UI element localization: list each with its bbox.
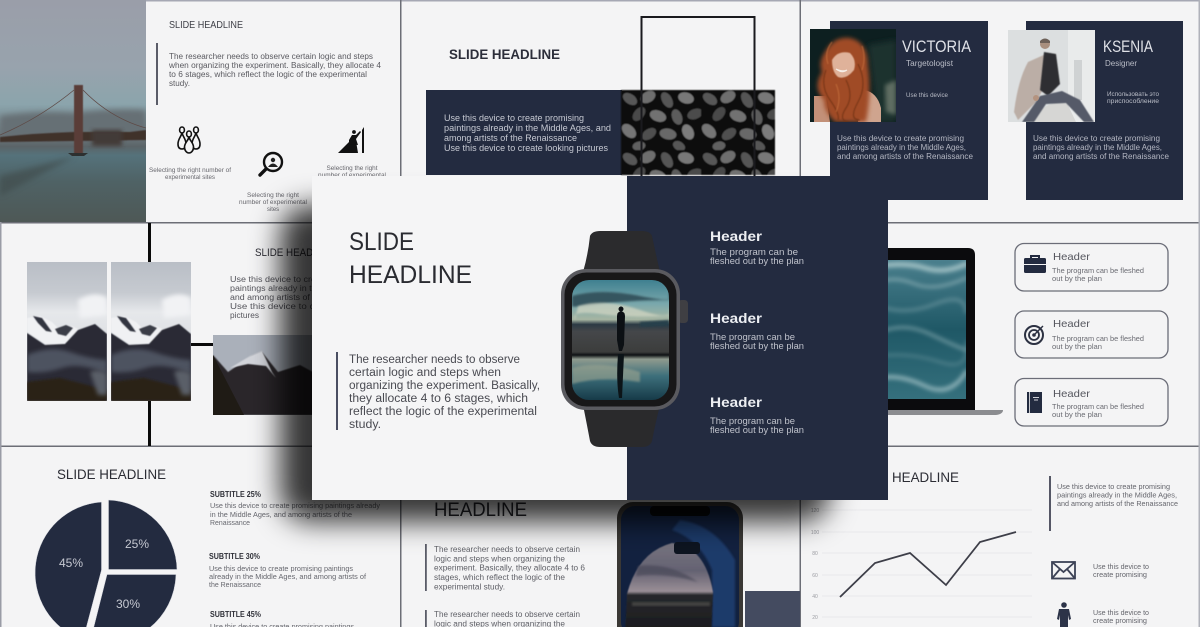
connector lines	[148, 223, 213, 446]
feature: header three: fleshed out by the plan	[710, 425, 804, 436]
legend: subtitle 25	[210, 490, 380, 527]
feature: header one: The program can be	[710, 247, 798, 258]
band text: Use this device to create looking pictures	[444, 143, 608, 153]
note: приспособление	[1107, 99, 1160, 105]
bio: Use this device to create promising	[1033, 134, 1160, 143]
line chart: 20	[812, 615, 818, 621]
box: Header two: out by the plan	[1052, 342, 1102, 351]
box: Header three	[1015, 378, 1168, 426]
photo: Ksenia portrait	[1008, 30, 1095, 122]
heading: SLIDE HEADLINE	[169, 19, 243, 31]
panel: leaves slide	[426, 17, 775, 177]
box: Header one: out by the plan	[1052, 274, 1102, 283]
caption: number of experimental	[318, 172, 387, 179]
text: create promising	[1093, 616, 1147, 625]
bio	[837, 134, 974, 161]
paragraph: to 6 stages, which reflect the logic of the experimental	[169, 70, 367, 79]
role: Targetologist	[906, 59, 954, 68]
icon: envelope	[1052, 562, 1075, 578]
bio: Use this device to create promising	[837, 134, 964, 143]
icon: bowling pins	[178, 127, 200, 153]
caption: Selecting the right	[326, 165, 378, 172]
card: Ksenia	[1026, 21, 1183, 200]
legend: subtitle 30	[209, 552, 367, 589]
paragraph	[1057, 482, 1178, 508]
note: Использовать это	[1107, 92, 1160, 98]
heading: HEADLINE	[892, 469, 959, 485]
paragraph: The researcher needs to observe certain logic and steps	[169, 52, 373, 61]
heading: SLIDE HEADLINE	[449, 46, 560, 62]
paragraph: when organizing the experiment. Basically, they allocate 4	[168, 61, 382, 70]
legend: subtitle 30: Use this device to create promising paintings	[209, 564, 353, 573]
caption	[239, 192, 308, 213]
strap	[583, 231, 660, 272]
paragraph	[168, 52, 382, 88]
watch illustration	[561, 231, 688, 447]
bio: and among artists of the Renaissance	[1033, 152, 1170, 161]
paragraph: reflect the logic of the experimental	[349, 406, 537, 418]
slice labels: 45%	[59, 556, 83, 570]
paragraph: Use this device to create promising	[1057, 482, 1170, 491]
icon: climber	[338, 127, 364, 153]
legend: subtitle 25: Renaissance	[210, 518, 250, 527]
caption	[318, 165, 387, 179]
panel: mountains slide	[27, 223, 312, 446]
slice: 30%	[90, 574, 176, 627]
box: Header two	[1015, 311, 1168, 358]
line chart: 60	[812, 573, 818, 579]
slice labels: 25%	[125, 537, 149, 551]
feature: header three: Header	[710, 394, 763, 410]
legend: subtitle 30: the Renaissance	[209, 580, 261, 589]
panel: line chart slide	[811, 469, 1178, 627]
role: Designer	[1105, 59, 1137, 68]
outline frame	[642, 17, 754, 177]
paragraph: Use this device to create promising	[230, 275, 370, 284]
paragraph	[434, 610, 580, 627]
legend: subtitle 30: already in the Middle Ages, and among artists of	[209, 572, 367, 581]
screen photo	[572, 280, 671, 400]
paragraph: they allocate 4 to 6 stages, which	[349, 393, 528, 405]
slice: 45%	[35, 502, 102, 627]
line chart: 100	[811, 530, 819, 536]
text: Use this device to	[1093, 562, 1149, 571]
text: create promising	[1093, 570, 1147, 579]
band text	[444, 113, 611, 153]
line chart	[811, 508, 1032, 621]
box: Header three: out by the plan	[1052, 410, 1102, 419]
name: Victoria: VICTORIA	[902, 37, 972, 56]
caption: number of experimental	[239, 199, 308, 206]
text	[1093, 562, 1149, 579]
main slide card	[312, 176, 888, 500]
photo: leaves	[621, 90, 775, 175]
feature: header one	[710, 228, 804, 267]
paragraph: The researcher needs to observe	[349, 354, 520, 366]
paragraph: Use this device to create looking	[230, 302, 370, 311]
accent bar	[425, 544, 427, 591]
navy text band	[426, 90, 622, 175]
slice labels	[59, 537, 149, 611]
bio: paintings already in the Middle Ages,	[1033, 143, 1162, 152]
text: Header	[1053, 251, 1091, 263]
caption: Selecting the right number of	[149, 167, 231, 174]
photo: mountains middle	[111, 262, 191, 401]
paragraph: and among artists of the Renaissance	[230, 293, 379, 302]
box: Header three: The program can be fleshed	[1052, 402, 1144, 411]
accent bar	[1049, 476, 1051, 531]
feature: header three	[710, 394, 804, 436]
icon: book	[1027, 392, 1042, 413]
icon: briefcase	[1024, 255, 1046, 273]
name: Ksenia: KSENIA	[1103, 37, 1154, 56]
panel: phone slide	[425, 500, 800, 627]
caption: sites	[267, 206, 280, 213]
paragraph: The researcher needs to observe certain	[434, 610, 580, 619]
paragraph: logic and steps when organizing the	[434, 554, 566, 564]
band text: paintings already in the Middle Ages, and	[444, 123, 611, 133]
paragraph: paintings already in the Middle Ages,	[1057, 490, 1177, 500]
right navy panel	[627, 176, 888, 500]
box: Header one	[1015, 244, 1168, 291]
feature: header two: fleshed out by the plan	[710, 341, 804, 352]
paragraph: and among artists of the Renaissance	[1057, 499, 1178, 508]
accent bar	[336, 352, 338, 430]
paragraph: paintings already in the Middle Ages,	[230, 284, 375, 293]
feature: header three: The program can be	[710, 416, 795, 427]
heading	[349, 228, 472, 289]
box: Header two: The program can be fleshed	[1052, 334, 1144, 343]
feature: header one: fleshed out by the plan	[710, 256, 804, 267]
paragraph: pictures	[230, 311, 259, 320]
legend: subtitle 45: SUBTITLE 45%	[210, 610, 261, 619]
icon: person	[1057, 602, 1071, 627]
feature: header one: Header	[710, 228, 763, 244]
caption: experimental sites	[165, 174, 216, 181]
feature: header two: The program can be	[710, 332, 795, 343]
feature: header two	[710, 310, 804, 352]
heading: SLIDE HEADLINE	[255, 247, 335, 259]
photo: mountains left	[27, 262, 107, 401]
bio: and among artists of the Renaissance	[837, 152, 974, 161]
laptop illustration	[880, 248, 1003, 415]
icon: target	[1025, 326, 1043, 344]
card: Victoria	[830, 21, 988, 200]
photo: Victoria portrait	[810, 29, 896, 122]
pie chart	[35, 500, 177, 627]
text: Header	[1053, 388, 1091, 400]
bio: paintings already in the Middle Ages,	[837, 143, 966, 152]
paragraph: The researcher needs to observe certain	[434, 545, 580, 554]
bio	[1033, 134, 1170, 161]
legend: subtitle 30: SUBTITLE 30%	[209, 552, 260, 561]
decorative navy block	[745, 591, 800, 627]
photo: mountains right	[213, 335, 313, 415]
icon: magnifier	[260, 153, 282, 175]
paragraph: study.	[349, 419, 381, 431]
paragraph	[434, 545, 586, 592]
slice labels: 30%	[116, 597, 140, 611]
slice: 25%	[108, 500, 177, 570]
box: Header one: The program can be fleshed	[1052, 266, 1144, 275]
left panel	[312, 176, 627, 500]
paragraph: study.	[169, 79, 190, 88]
card shadow	[280, 205, 830, 522]
panel: bridge slide	[0, 0, 387, 222]
case	[561, 269, 680, 410]
heading: HEADLINE	[434, 500, 527, 521]
crown	[678, 300, 688, 323]
paragraph: certain logic and steps when	[349, 367, 501, 379]
panel: laptop slide	[880, 244, 1168, 426]
phone illustration	[617, 502, 743, 627]
legend: subtitle 45	[210, 610, 354, 627]
paragraph: stages, which reflect the logic of the	[434, 573, 566, 582]
text: Header	[1053, 318, 1091, 330]
line chart: 40	[812, 594, 818, 600]
heading: SLIDE	[349, 228, 414, 256]
line chart: 80	[812, 551, 818, 557]
note: Use this device	[906, 93, 949, 99]
accent bar	[425, 610, 427, 627]
paragraph: experiment. Basically, they allocate 4 to 6	[434, 564, 586, 572]
feature: header two: Header	[710, 310, 763, 326]
panel: team slide	[810, 21, 1183, 200]
panel: pie chart slide	[35, 466, 380, 627]
band text: Use this device to create promising	[444, 113, 584, 123]
legend: subtitle 25: Use this device to create promising paintings already	[210, 501, 380, 510]
legend: subtitle 25: in the Middle Ages, and among artists of the	[210, 510, 352, 519]
caption	[149, 167, 231, 181]
paragraph: organizing the experiment. Basically,	[349, 380, 540, 392]
line chart: 120	[811, 508, 819, 514]
caption: Selecting the right	[247, 192, 299, 199]
photo: foggy bridge	[0, 0, 146, 222]
accent bar	[156, 43, 158, 105]
text	[1093, 608, 1149, 625]
band text: among artists of the Renaissance	[444, 133, 577, 143]
paragraph	[230, 276, 312, 320]
legend: subtitle 25: SUBTITLE 25%	[210, 490, 261, 499]
paragraph	[349, 354, 540, 431]
heading: HEADLINE	[349, 261, 472, 289]
heading: SLIDE HEADLINE	[57, 466, 166, 482]
note	[1107, 92, 1160, 105]
text: Use this device to	[1093, 608, 1149, 617]
paragraph: experimental study.	[434, 582, 505, 592]
